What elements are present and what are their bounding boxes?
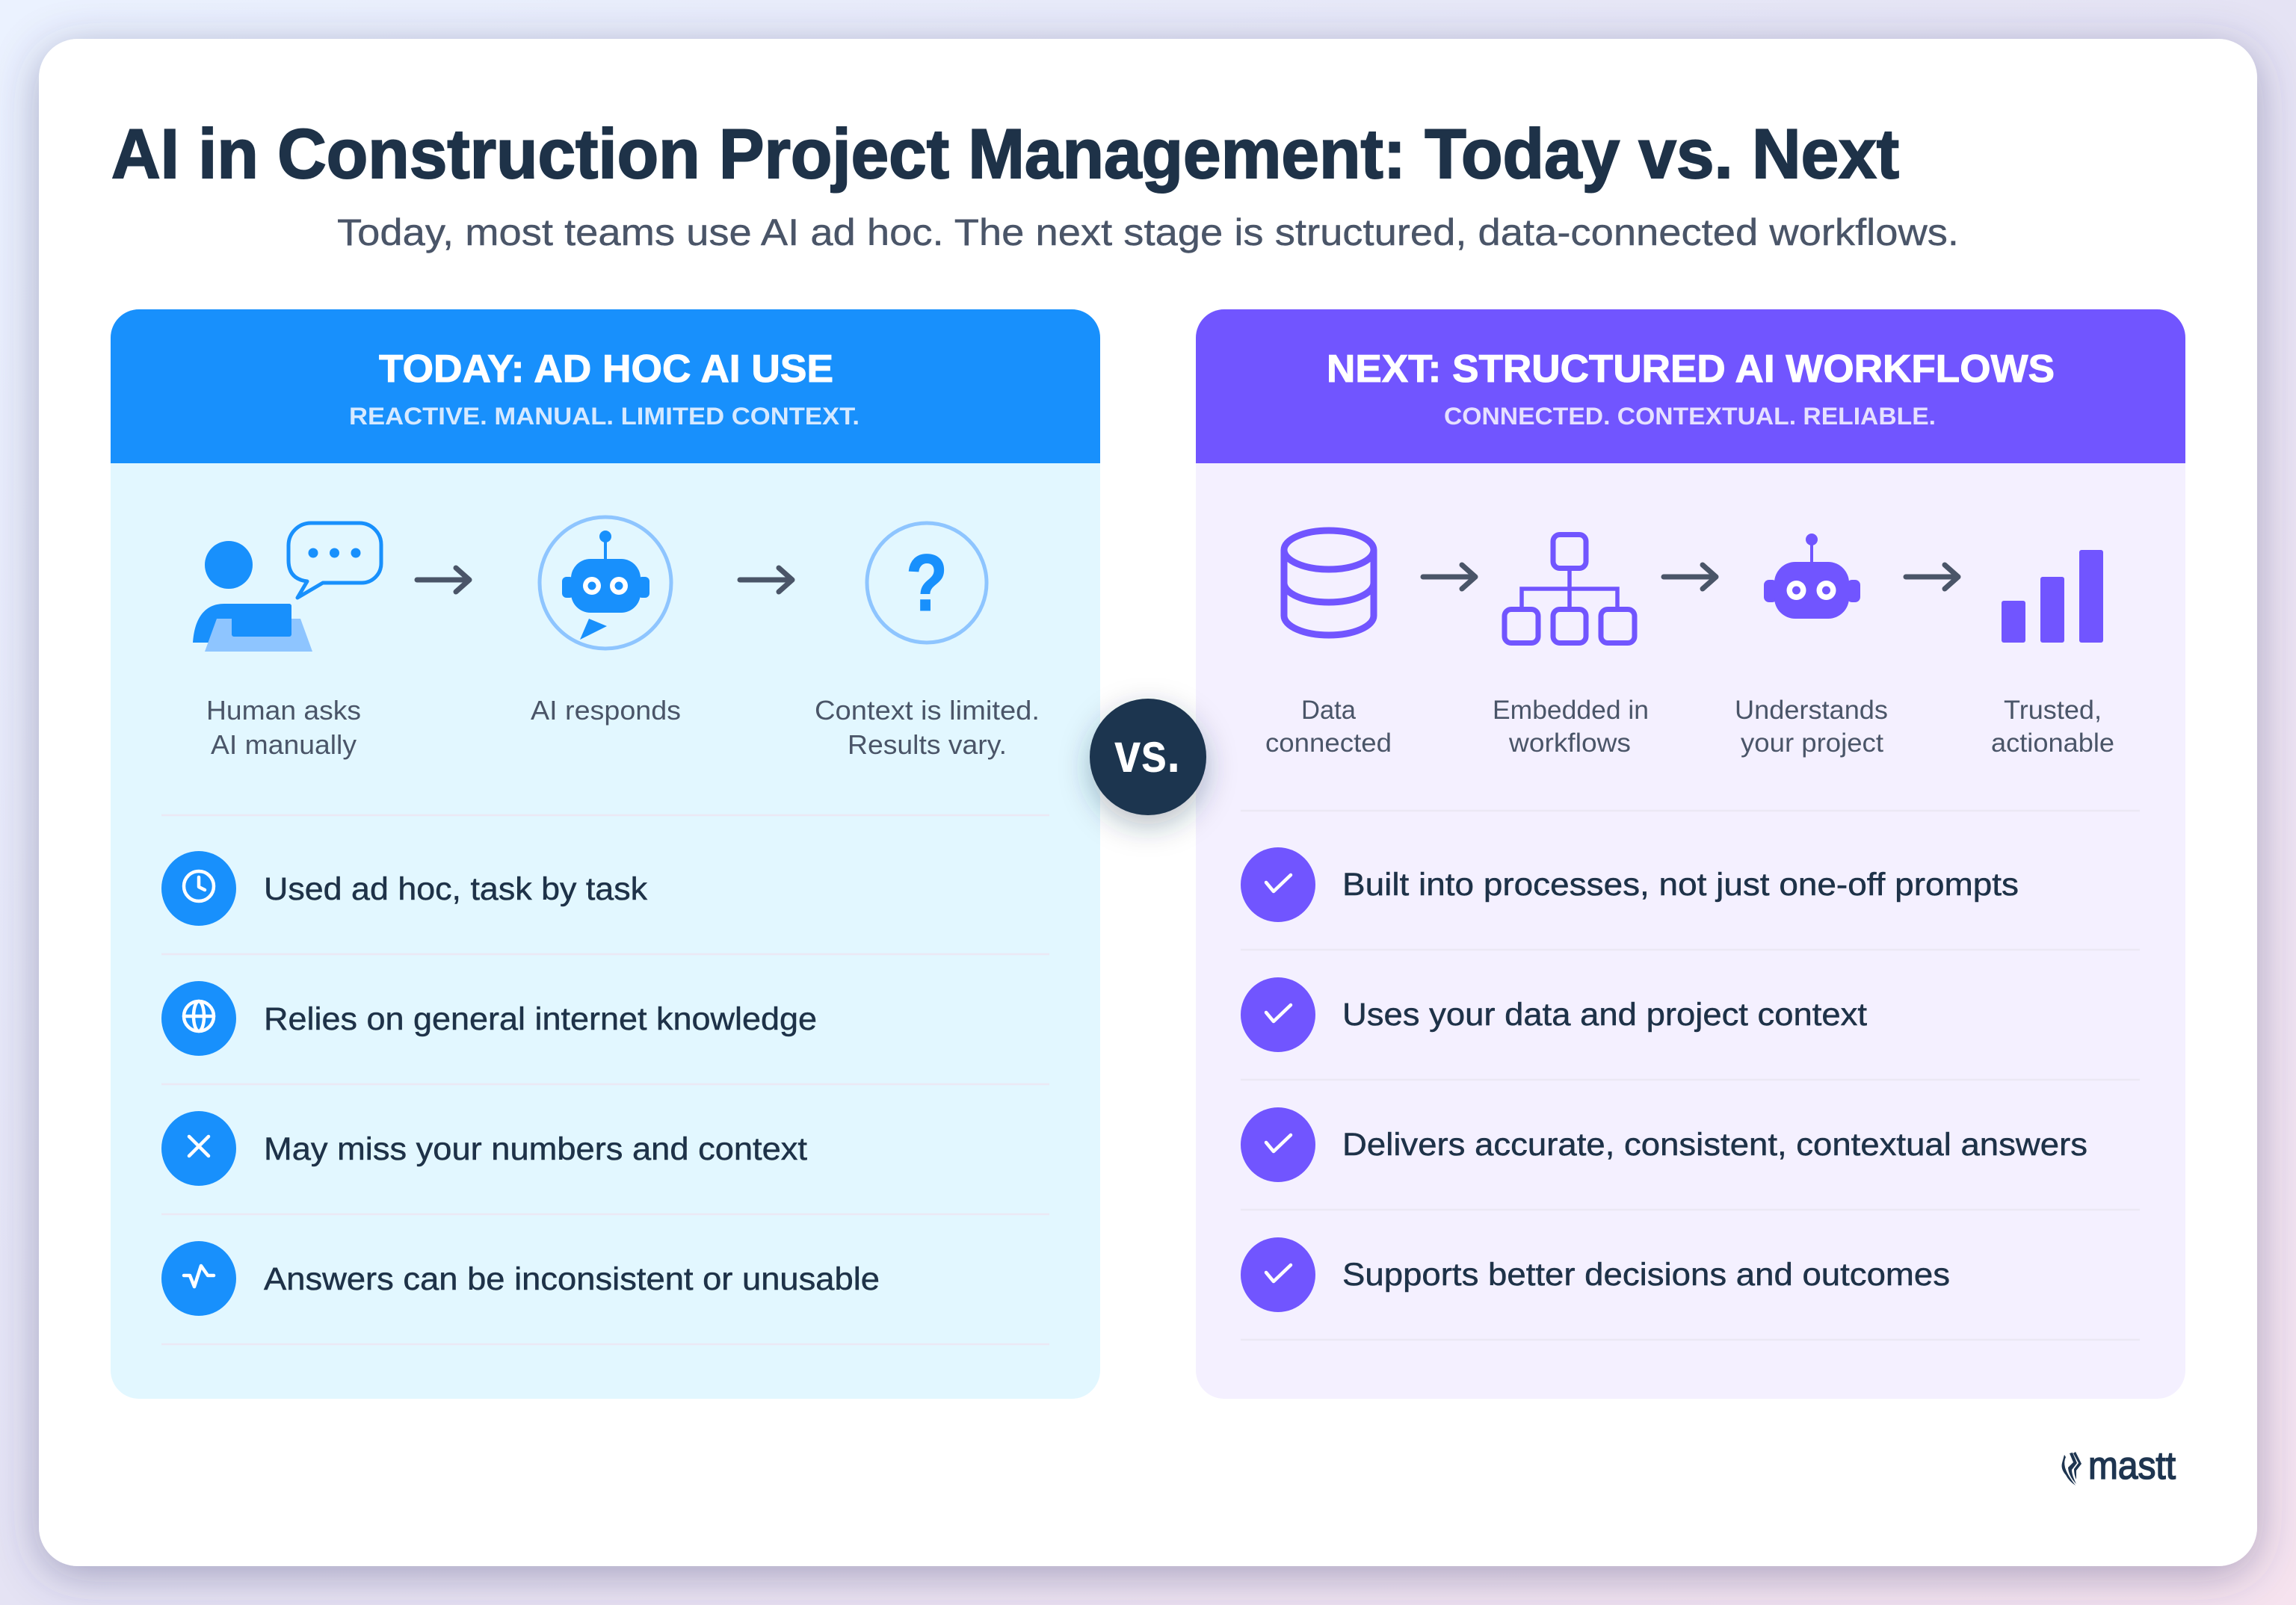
icon: check xyxy=(1266,1135,1291,1151)
item text: Used ad hoc, task by task xyxy=(264,871,648,907)
panel header: next xyxy=(1196,309,2185,463)
icon: question mark in circle: ? xyxy=(906,537,948,628)
icon: robot in circle xyxy=(540,517,671,649)
panel header: today xyxy=(111,309,1100,463)
step label: human asks: AI manually xyxy=(211,729,357,760)
step label: embedded in workflows: Embedded in xyxy=(1493,696,1649,725)
icon: clock xyxy=(184,871,214,901)
icon: globe xyxy=(184,1001,214,1031)
item text: Uses your data and project context xyxy=(1342,997,1867,1033)
panel body: next xyxy=(1196,309,2185,1399)
panel body: today xyxy=(111,309,1100,1399)
subtitle: Today, most teams use AI ad hoc. The next stage is structured, data-connected workflows. xyxy=(337,211,1959,253)
wordmark: mastt xyxy=(2088,1444,2176,1488)
icon: question mark in circle xyxy=(867,523,987,643)
step label: context limited: Context is limited. xyxy=(815,695,1040,726)
title: AI in Construction Project Management: Today vs. Next xyxy=(111,114,1899,193)
arrow: human to AI xyxy=(417,568,469,592)
step label: data connected xyxy=(1265,696,1392,758)
icon: hierarchy xyxy=(1505,535,1635,643)
step label: context limited xyxy=(815,695,1040,760)
step label: understands your project xyxy=(1735,696,1888,758)
icon: cross xyxy=(189,1137,209,1156)
step label: trusted actionable: Trusted, xyxy=(2004,696,2102,725)
step label: data connected: connected xyxy=(1265,729,1392,758)
arrow: workflows to project xyxy=(1664,565,1716,589)
heading: today: TODAY: AD HOC AI USE xyxy=(379,347,833,391)
icon: database xyxy=(1284,531,1374,635)
item text: May miss your numbers and context xyxy=(264,1131,807,1167)
list item: better decisions xyxy=(1241,1237,1950,1312)
panel: today xyxy=(111,309,1100,1399)
item text: Answers can be inconsistent or unusable xyxy=(264,1261,880,1297)
step label: understands your project: Understands xyxy=(1735,696,1888,725)
step label: AI responds: AI responds xyxy=(531,695,681,726)
step label: data connected: Data xyxy=(1301,696,1357,725)
icon: check xyxy=(1266,1005,1291,1021)
vs badge: vs. xyxy=(1114,722,1180,784)
heading: next: NEXT: STRUCTURED AI WORKFLOWS xyxy=(1327,347,2055,391)
item text: Relies on general internet knowledge xyxy=(264,1001,817,1037)
list item: used ad hoc xyxy=(161,851,648,926)
subheading: next: CONNECTED. CONTEXTUAL. RELIABLE. xyxy=(1444,403,1936,430)
logo mark xyxy=(2062,1452,2081,1485)
step label: trusted actionable: actionable xyxy=(1991,729,2114,758)
step label: understands your project: your project xyxy=(1741,729,1883,758)
icon: pulse xyxy=(184,1266,214,1287)
logo: mastt xyxy=(2062,1444,2176,1488)
icon: check xyxy=(1266,1265,1291,1281)
arrow: AI to context xyxy=(740,568,792,592)
step label: human asks xyxy=(206,695,361,760)
list item: built into processes xyxy=(1241,847,2019,922)
step label: embedded in workflows: workflows xyxy=(1508,729,1631,758)
icon: robot xyxy=(1764,534,1860,619)
icon: bar chart xyxy=(2002,550,2103,643)
list item: delivers accurate xyxy=(1241,1107,2087,1182)
list item: uses your data xyxy=(1241,977,1867,1052)
icon: human with laptop and speech bubble xyxy=(193,523,381,652)
step label: context limited: Results vary. xyxy=(848,729,1007,760)
panel: next xyxy=(1196,309,2185,1399)
arrow: data to workflows xyxy=(1423,565,1475,589)
subheading: today: REACTIVE. MANUAL. LIMITED CONTEXT. xyxy=(349,403,860,430)
step label: embedded in workflows xyxy=(1493,696,1649,758)
list item: may miss xyxy=(161,1111,807,1186)
list item: inconsistent answers xyxy=(161,1241,880,1316)
item text: Supports better decisions and outcomes xyxy=(1342,1257,1950,1293)
vs badge xyxy=(1090,699,1206,815)
list item: general knowledge xyxy=(161,981,817,1056)
arrow: project to trusted xyxy=(1906,565,1958,589)
item text: Delivers accurate, consistent, contextual answers xyxy=(1342,1127,2087,1163)
step label: trusted actionable xyxy=(1991,696,2114,758)
icon: check xyxy=(1266,875,1291,891)
step label: human asks: Human asks xyxy=(206,695,361,726)
item text: Built into processes, not just one-off prompts xyxy=(1342,867,2019,903)
